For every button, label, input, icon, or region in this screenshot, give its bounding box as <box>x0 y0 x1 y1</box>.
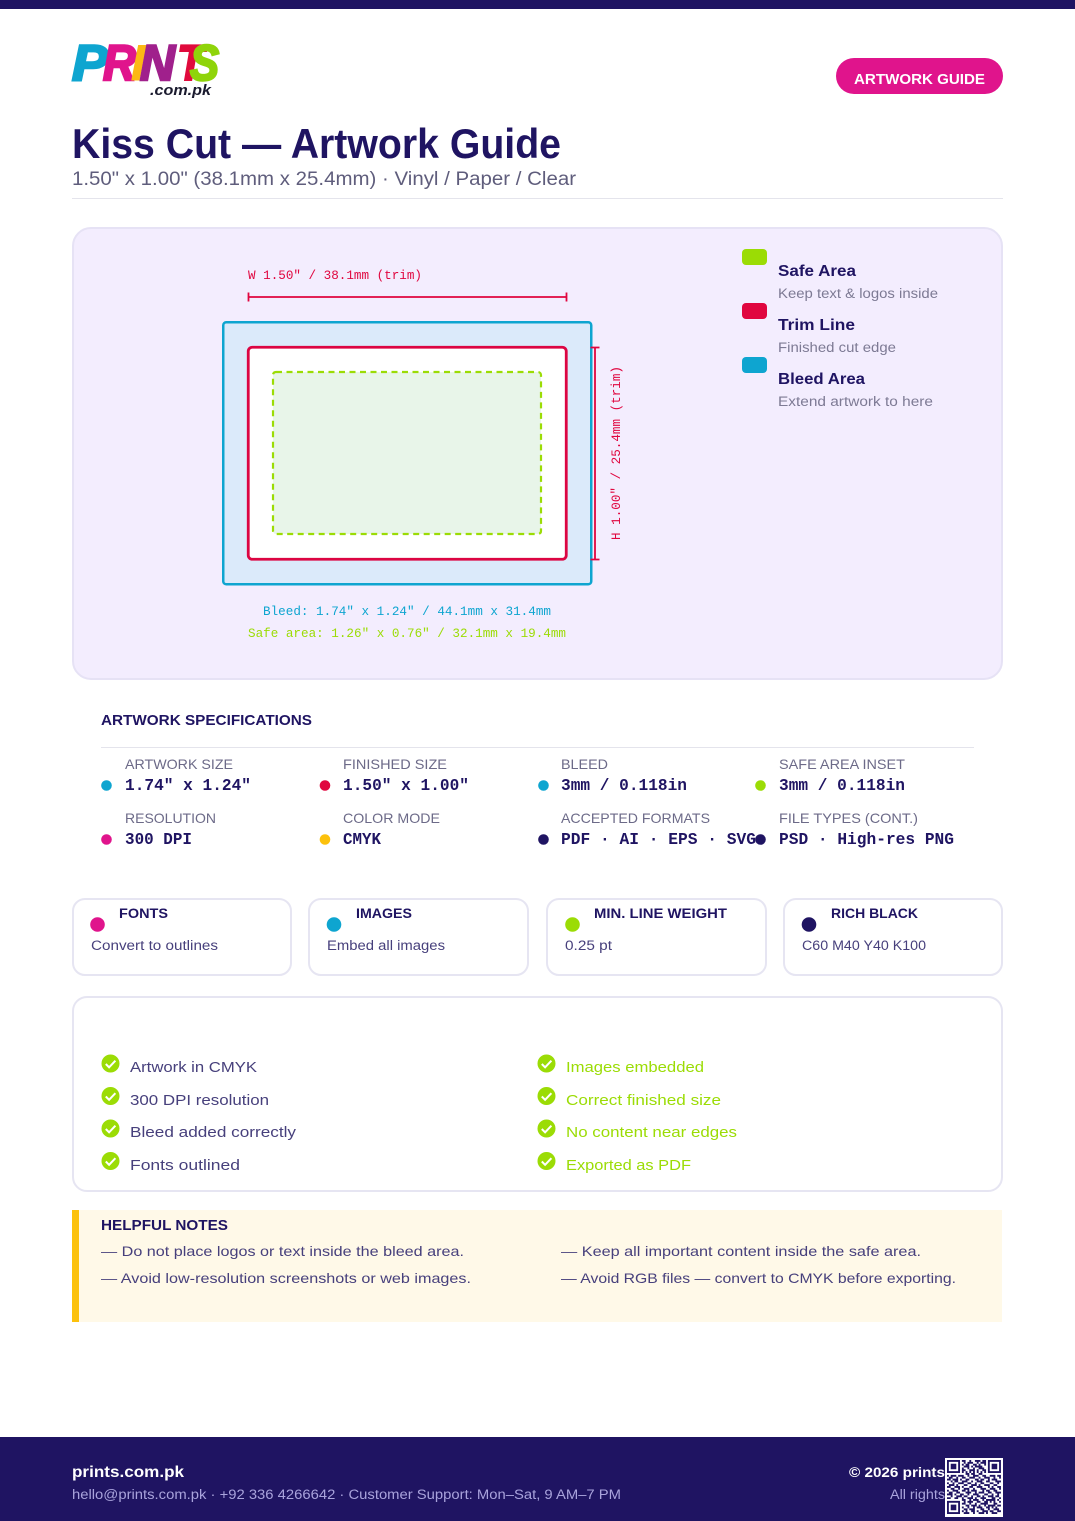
legend: bleed area: Extend artwork to here <box>778 394 933 409</box>
logo: I <box>131 35 146 91</box>
spec: finished size: FINISHED SIZE <box>343 756 447 772</box>
card: fonts <box>73 899 291 975</box>
legend <box>742 249 938 409</box>
spec: safe area inset: SAFE AREA INSET <box>779 756 905 772</box>
check: bleed <box>102 1120 297 1141</box>
check: finished size: Correct finished size <box>566 1092 721 1109</box>
footer: prints.com.pk <box>72 1464 184 1481</box>
check: finished size <box>538 1087 721 1109</box>
check: artwork in CMYK: Artwork in CMYK <box>130 1059 257 1076</box>
logo: S <box>190 35 219 91</box>
footer: hello@prints.com.pk · +92 336 4266642 · Customer Support: Mon–Sat, 9 AM–7 PM <box>72 1487 621 1502</box>
panel: dieline diagram <box>73 228 1002 679</box>
check: fonts <box>102 1152 240 1174</box>
check: fonts: Fonts outlined <box>130 1157 240 1174</box>
spec: accepted formats <box>538 810 756 850</box>
spec table <box>101 756 954 850</box>
panel: helpful notes: — Avoid RGB files — convert to CMYK before exporting. <box>561 1270 956 1286</box>
spec: accepted formats: PDF · AI · EPS · SVG <box>561 831 756 850</box>
check: bleed: Bleed added correctly <box>130 1124 297 1141</box>
check: exported <box>538 1152 691 1174</box>
card: min line weight: 0.25 pt <box>565 938 612 953</box>
panel: checklist <box>73 997 1002 1191</box>
spec: file types: PSD · High-res PNG <box>779 831 954 850</box>
check: 300 DPI <box>102 1087 269 1109</box>
check: 300 DPI: 300 DPI resolution <box>130 1092 269 1109</box>
logo <box>72 35 219 99</box>
spec: resolution: RESOLUTION <box>125 810 216 826</box>
spec: accepted formats: ACCEPTED FORMATS <box>561 810 710 826</box>
spec: color mode: COLOR MODE <box>343 810 440 826</box>
title: Kiss Cut — Artwork Guide <box>72 120 561 167</box>
footer <box>0 1437 1075 1521</box>
width dimension <box>248 269 566 302</box>
check: exported: Exported as PDF <box>566 1157 691 1174</box>
spec: resolution: 300 DPI <box>125 831 192 850</box>
card: rich black: C60 M40 Y40 K100 <box>802 938 926 953</box>
legend: bleed area <box>742 357 933 409</box>
spec: bleed: BLEED <box>561 756 608 772</box>
panel: helpful notes: — Do not place logos or text inside the bleed area. <box>101 1243 464 1259</box>
check: images embedded: Images embedded <box>566 1059 704 1076</box>
height dimension <box>590 348 624 560</box>
legend: trim line <box>742 303 896 355</box>
check: artwork in CMYK <box>102 1054 257 1076</box>
spec: bleed: 3mm / 0.118in <box>561 777 687 796</box>
logo: N <box>140 35 176 91</box>
height dimension: H 1.00" / 25.4mm (trim) <box>610 366 624 540</box>
safe area <box>273 372 541 534</box>
legend: trim line: Trim Line <box>778 317 855 334</box>
spec: safe area inset: 3mm / 0.118in <box>779 777 905 796</box>
top bar <box>0 0 1075 9</box>
card: images: IMAGES <box>356 905 412 921</box>
legend: bleed area: Bleed Area <box>778 371 865 388</box>
card: images <box>309 899 528 975</box>
bleed area <box>223 322 591 584</box>
logo: P <box>72 35 109 91</box>
check: content edges <box>538 1120 737 1141</box>
spec: bleed <box>538 756 687 796</box>
card: fonts: FONTS <box>119 905 168 921</box>
card: images: Embed all images <box>327 938 445 953</box>
spec: file types <box>755 810 954 850</box>
legend: safe area <box>742 249 938 301</box>
spec: artwork size <box>101 756 251 796</box>
spec: finished size: 1.50" x 1.00" <box>343 777 469 796</box>
safe area dimensions: Safe area: 1.26" x 0.76" / 32.1mm x 19.4mm <box>248 627 566 641</box>
spec: file types: FILE TYPES (CONT.) <box>779 810 918 826</box>
legend: trim line: Finished cut edge <box>778 340 896 355</box>
spec: artwork size: ARTWORK SIZE <box>125 756 233 772</box>
QR code <box>945 1458 1003 1517</box>
subtitle: 1.50" x 1.00" (38.1mm x 25.4mm) · Vinyl / Paper / Clear <box>72 169 577 190</box>
badge: artwork guide <box>836 58 1003 94</box>
card: fonts: Convert to outlines <box>91 938 218 953</box>
width dimension: W 1.50" / 38.1mm (trim) <box>248 269 422 283</box>
logo: .com.pk <box>150 83 212 99</box>
heading: artwork specifications: ARTWORK SPECIFICATIONS <box>101 712 312 729</box>
legend: safe area: Keep text & logos inside <box>778 286 938 301</box>
panel: helpful notes: — Avoid low-resolution screenshots or web images. <box>101 1270 471 1286</box>
panel: helpful notes <box>72 1210 1002 1322</box>
spec: artwork size: 1.74" x 1.24" <box>125 777 251 796</box>
card: min line weight <box>547 899 766 975</box>
spec: finished size <box>320 756 469 796</box>
panel: helpful notes: — Keep all important content inside the safe area. <box>561 1243 921 1259</box>
trim line <box>248 347 566 559</box>
check: images embedded <box>538 1054 704 1076</box>
legend: safe area: Safe Area <box>778 263 856 280</box>
footer: © 2026 prints <box>849 1464 945 1480</box>
logo: R <box>103 35 136 91</box>
spec: color mode: CMYK <box>343 831 382 850</box>
spec: color mode <box>320 810 440 850</box>
card: min line weight: MIN. LINE WEIGHT <box>594 905 727 921</box>
logo: T <box>177 35 208 91</box>
panel: helpful notes: HELPFUL NOTES <box>101 1217 228 1234</box>
spec: resolution <box>101 810 216 850</box>
bleed dimensions: Bleed: 1.74" x 1.24" / 44.1mm x 31.4mm <box>263 605 551 619</box>
check: content edges: No content near edges <box>566 1124 737 1141</box>
spec: safe area inset <box>755 756 905 796</box>
footer: All rights <box>890 1487 945 1502</box>
badge: artwork guide: ARTWORK GUIDE <box>854 72 985 88</box>
card: rich black: RICH BLACK <box>831 905 918 921</box>
card: rich black <box>784 899 1002 975</box>
